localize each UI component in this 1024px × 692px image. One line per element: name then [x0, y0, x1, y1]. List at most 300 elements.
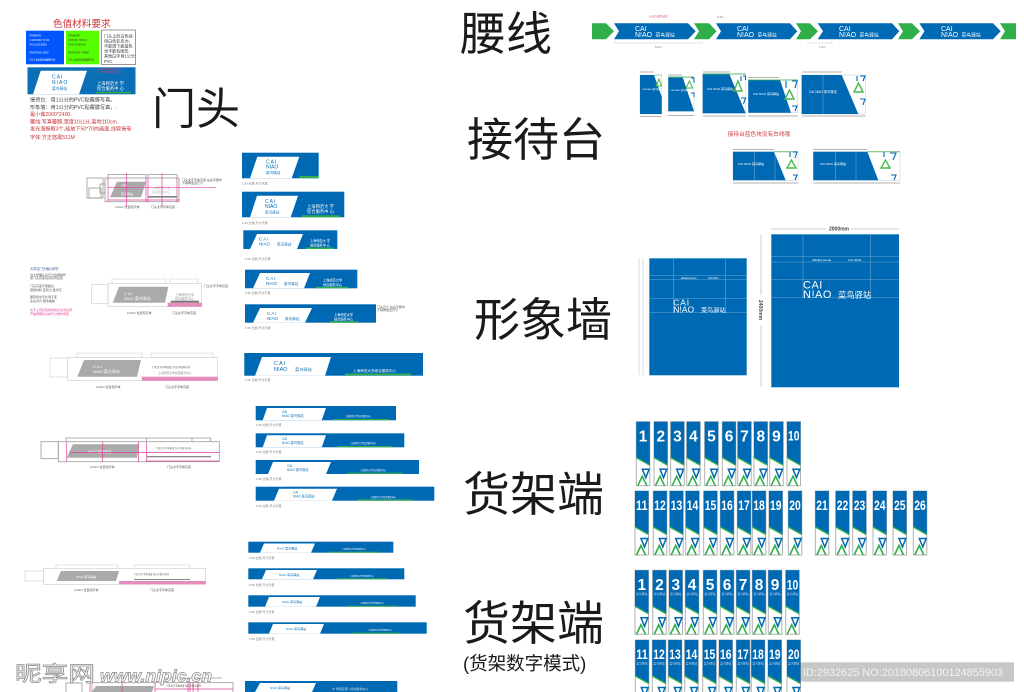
note block: door head confirmation: 招牌材料 亚克力 发光字	[30, 287, 62, 292]
tag 5	[703, 570, 717, 634]
image wall small	[639, 258, 747, 375]
tag 4	[687, 422, 700, 486]
swatch: blue: 门头上蓝色用色值覆膜写真	[29, 58, 56, 62]
tag 1: 1	[637, 577, 646, 594]
tag 2: 2	[655, 577, 664, 594]
tag 7: 菜鸟驿站	[737, 592, 749, 596]
tag 3	[671, 422, 684, 486]
shelf tags row 4 cropped	[635, 640, 800, 692]
tag 13: 菜鸟驿站	[669, 662, 681, 666]
elevation drawing 1: LOGO 位置和字体	[115, 204, 140, 209]
tag 2: 2	[656, 428, 665, 445]
tag 4: 4	[688, 577, 697, 594]
tag 20: 20	[788, 646, 800, 662]
sample door banner: 门头字体要求 亚克力 发光字	[97, 70, 122, 74]
tag 11: 11	[636, 497, 648, 513]
image wall large: CAI	[803, 280, 823, 292]
door sign panel 1: 1:50 比例 尺寸示意	[242, 180, 268, 186]
tag 22: 22	[837, 497, 848, 513]
material notes: 接待台：用1公分的PVC贴覆膜写真。	[30, 96, 115, 104]
image wall small: Alibaba Group	[681, 277, 697, 280]
tag 23	[853, 491, 866, 555]
tag 13	[668, 640, 682, 692]
tag 3: 3	[671, 577, 680, 594]
waistline strip: 菜鸟驿站	[962, 32, 981, 38]
waistline strip: 0.3m	[717, 15, 724, 19]
sign B4: N!AO 菜鸟驿站	[286, 626, 306, 631]
tag 19	[768, 640, 782, 692]
door sign panel 2: 菜鸟驿站	[265, 210, 280, 214]
sign A1: N!AO 菜鸟驿站	[282, 413, 304, 418]
tag 17	[737, 491, 751, 555]
waistline strip: CAI	[737, 26, 749, 33]
tag 12	[652, 640, 666, 692]
door sign panel 4: 菜鸟驿站	[284, 281, 299, 286]
dimension: 2400mm: 2400mm	[757, 300, 763, 321]
sign A4: N!AO 菜鸟驿站	[293, 494, 315, 499]
door sign panel 4: 综合服务中心	[323, 282, 343, 287]
tag 13: 13	[669, 646, 681, 662]
swatch: green: PANTONE 7488C	[68, 50, 89, 54]
tag 5: 菜鸟驿站	[704, 592, 716, 596]
sign B4	[248, 622, 427, 641]
image wall small: CAI NIAO	[708, 277, 719, 280]
note box: door head colours: 门头上的白色块	[104, 32, 133, 38]
elevation drawing 1: 门头文字字体高度 左右字居中	[182, 177, 222, 182]
tag 25: 25	[894, 497, 906, 513]
door sign panel 2: 上海师范大 学	[307, 203, 335, 210]
elevation drawing 1	[87, 173, 222, 209]
note block: door head confirmation: 图形和文字比例不变	[30, 294, 57, 299]
tag 10	[786, 570, 799, 634]
tag 9	[768, 570, 782, 634]
tag 16: 16	[720, 646, 732, 662]
sign B2: 上海师范大学综合服务中心	[350, 574, 374, 578]
door sign panel 3: N!AO	[259, 242, 271, 246]
tag 4: 4	[689, 428, 698, 445]
tag 14	[685, 640, 698, 692]
note box: door head colours: PVC	[104, 59, 112, 64]
sample door banner: NIAO	[52, 80, 68, 86]
door sign panel 3	[243, 230, 337, 261]
tag 24: 24	[874, 497, 886, 513]
door sign panel 1: CAI	[266, 160, 277, 166]
swatch: green: PRIMARY	[68, 34, 81, 38]
image wall small: N!AO	[673, 304, 694, 314]
elevation drawing 4: 门头文字字体高度 左右字居中对齐	[156, 446, 192, 450]
door sign panel 6: N!AO	[274, 367, 288, 373]
tag 2	[654, 422, 668, 486]
note: desk blue block has no white line: 接待台蓝色块没有白线哦	[728, 130, 791, 138]
watermark: ID bar: ID:2932625 NO:20180806100124855903	[803, 667, 1003, 679]
sign A4: 1:50 比例 尺寸示意	[256, 503, 282, 508]
elevation drawing 3: 门头文字字体高度 左右字居中对齐	[152, 365, 191, 369]
tag 8: 菜鸟驿站	[753, 592, 765, 596]
elevation drawing 4	[41, 438, 219, 469]
swatch: green: C65 M0 Y90 K0	[68, 38, 87, 42]
door sign panel 6: 上海师范大学综合服务中心	[353, 368, 397, 373]
tag 14: 菜鸟驿站	[686, 662, 697, 666]
elevation drawing 4: 门头文字字体高度	[167, 464, 191, 469]
tag 4	[685, 570, 699, 634]
tag 3: 菜鸟驿站	[670, 592, 682, 596]
tag 6: 菜鸟驿站	[721, 592, 733, 596]
tag 12: 菜鸟驿站	[653, 662, 665, 666]
desk panel 4	[748, 78, 798, 116]
waistline strip: N!AO	[635, 32, 653, 39]
elevation drawing 6 cropped	[66, 678, 233, 692]
door sign panel 2: 1:50 比例 尺寸示意	[242, 220, 268, 225]
swatch: blue	[26, 31, 64, 64]
door sign bottom cropped: ⊕ 学院名称 | 综合服务中心	[332, 686, 368, 691]
sign A1: 上海师范大学综合服务中心	[345, 414, 372, 418]
tag 16: 16	[721, 497, 733, 513]
elevation drawing 3	[50, 353, 218, 389]
elevation drawing 2: 综合服务中心	[175, 296, 195, 301]
note block: door head confirmation: 左右对齐 居中摆放	[30, 298, 55, 303]
waistline strip: N!AO	[839, 32, 857, 39]
tag 7	[738, 422, 751, 486]
tag 15	[703, 640, 716, 692]
door sign panel 4: 1:50 比例 尺寸示意	[245, 290, 271, 295]
elevation drawing 3: 门头文字字体高度	[165, 384, 189, 389]
tag 6	[722, 422, 736, 486]
tag 26	[913, 491, 927, 555]
tag 17: 菜鸟驿站	[737, 662, 749, 666]
tag 8	[754, 422, 768, 486]
image wall small: 菜鸟驿站	[701, 306, 726, 314]
tag 3	[669, 570, 682, 634]
door sign panel 1: NIAO	[266, 164, 278, 170]
elevation drawing 4: LOGO 位置和字体	[90, 464, 115, 469]
sign B4: 1:50 比例 尺寸示意	[249, 636, 275, 641]
sign B1: N!AO 菜鸟驿站	[277, 546, 297, 550]
tag 11	[635, 491, 648, 555]
watermark: nipic: 昵享网	[15, 663, 95, 686]
tag 18: 18	[753, 497, 765, 513]
sign B3: N!AO 菜鸟驿站	[282, 599, 302, 604]
door sign panel 5	[245, 304, 405, 330]
note block: door head confirmation	[30, 266, 72, 316]
sign A1	[256, 406, 396, 427]
tag 16	[720, 491, 734, 555]
elevation drawing 5: LOGO 位置和字体	[74, 587, 99, 592]
door sign bottom cropped	[245, 681, 397, 692]
elevation drawing 2: N!AO 菜鸟驿站	[124, 295, 151, 301]
material notes: 腰线:写真覆膜,宽度10公分,离地110cm.	[30, 117, 118, 125]
shelf tags row 3 with small caption	[635, 570, 799, 634]
door sign panel 6: 菜鸟驿站	[295, 366, 312, 373]
desk panel 5	[802, 72, 866, 116]
tag 9: 9	[771, 577, 780, 594]
sign B3	[248, 595, 416, 614]
swatch: green	[66, 31, 99, 64]
tag 13	[670, 491, 683, 555]
desk panel 3: CAI NIAO 菜鸟驿站	[707, 86, 733, 91]
door sign panel 5: 不够再加宽尺寸	[377, 307, 398, 312]
sign B2: N!AO 菜鸟驿站	[279, 572, 299, 577]
door sign panel 3: 综合服务中 心	[310, 242, 331, 248]
note block: door head confirmation: 文字上有红色的线和标注请注意	[30, 307, 72, 312]
door sign narrow group A	[256, 406, 434, 508]
note box: door head colours: 也不能有图形.	[104, 48, 130, 54]
desk panel 1	[640, 72, 662, 116]
door sign panel 3: 上海师范大 学	[310, 238, 330, 243]
elevation drawing 1: 门头文字字体高度	[151, 204, 175, 209]
door sign panel 5: 门头尺寸 左右字居中	[377, 304, 405, 309]
tag 18	[751, 640, 765, 692]
tag 19: 19	[769, 646, 781, 662]
tag 24	[873, 491, 886, 555]
tag 5	[705, 422, 718, 486]
watermark: nipic	[15, 663, 212, 686]
door sign panel 5: 综合服务中心	[334, 316, 354, 322]
sign A3: N!AO 菜鸟驿站	[287, 467, 309, 472]
waistline strip: CAI	[839, 26, 851, 33]
door sign panel 5: 上海师范大学	[334, 312, 353, 317]
tag 9	[770, 422, 783, 486]
desk panel 2	[668, 75, 694, 116]
tag 20: 20	[789, 497, 801, 513]
elevation drawing 5: 门头文字字体高度	[150, 587, 174, 592]
tag 6: 6	[723, 577, 732, 594]
elevation drawing 3: 上海师范大学综合服务中心	[158, 371, 192, 375]
waistline strip: N!AO	[737, 32, 755, 39]
heading: 腰线: 腰线	[460, 8, 552, 60]
sign A3: 上海师范大学综合服务中心	[360, 468, 387, 472]
sign B4: 上海师范大学综合服务中心	[368, 628, 392, 632]
tag 7	[736, 570, 750, 634]
tag 15	[704, 491, 717, 555]
desk panel 5: CAI NIAO 菜鸟驿站	[809, 89, 837, 94]
elevation drawing 1: 综合服务中心	[152, 189, 170, 194]
tag 18: 18	[752, 646, 764, 662]
elevation drawing 2	[92, 279, 228, 315]
tag 3: 3	[673, 428, 682, 445]
waistline strip: N!AO	[941, 32, 959, 39]
sign B3: 上海师范大学综合服务中心	[360, 601, 384, 605]
panel: colour and material requirements	[26, 18, 136, 141]
material notes: 字体:方正悠黑511M	[30, 133, 75, 141]
door sign panel 2: NIAO	[265, 204, 277, 210]
desk panel 3	[703, 72, 746, 116]
elevation drawing 3: CAI	[93, 364, 103, 369]
desk panel 7: CAI NIAO 菜鸟驿站	[820, 161, 846, 166]
waistline strip: 菜鸟驿站	[860, 32, 879, 38]
sign A4: CAI	[293, 491, 298, 495]
elevation drawing 1: 上海师范大学	[152, 185, 170, 190]
tag 17: 17	[738, 497, 750, 513]
waistline strip: LOGO 居中对齐	[649, 14, 668, 18]
tag 21	[815, 491, 829, 555]
subheading: 货架数字模式: (货架数字模式)	[463, 653, 586, 674]
tag 1	[636, 422, 650, 486]
tag 13: 13	[671, 497, 682, 513]
heading: 货架端: 货架端	[463, 468, 604, 521]
desk panel 7	[813, 150, 900, 183]
tag 11	[635, 640, 649, 692]
waistline strip: 菜鸟驿站	[758, 32, 777, 38]
sample door banner: 菜鸟驿站	[52, 86, 67, 91]
note box: door head colours: 其他白字用1公分	[104, 52, 135, 58]
tag 1: 1	[639, 428, 648, 445]
image wall large: 菜鸟驿站	[838, 290, 871, 300]
sign B1	[248, 542, 393, 560]
tag 15: 15	[704, 646, 715, 662]
note block: door head confirmation: 门头高度不能超过	[30, 283, 54, 288]
tag 8	[752, 570, 766, 634]
sign B3: 1:50 比例 尺寸示意	[249, 609, 275, 614]
tag 25	[893, 491, 906, 555]
elevation drawing 2: CAI	[124, 291, 134, 296]
note box: door head colours: 不能透下面蓝色	[104, 42, 133, 48]
sign A2: 上海师范大学综合服务中心	[350, 441, 377, 445]
tag 10: 10	[788, 428, 800, 444]
door sign panel 2: 综合服务中 心	[307, 208, 335, 215]
waistline strip: CAI	[941, 26, 953, 33]
elevation drawing 3: N!AO 菜鸟驿站	[93, 368, 120, 374]
elevation drawing 1: 菜鸟驿站	[121, 191, 133, 196]
desk panel 2: CAI NIAO 菜鸟驿站	[670, 88, 690, 92]
sample door banner: 综合服务中 心	[97, 85, 125, 92]
elevation drawing 2: LOGO 位置和字体	[127, 310, 152, 315]
elevation drawing 2: 门头文字字体高度	[172, 310, 196, 315]
elevation drawing 2: 门头文字字体高度	[204, 283, 228, 288]
tag 16	[719, 640, 732, 692]
heading: 货架端 (数字模式): 货架端	[463, 597, 604, 650]
desk panel 6: CAI NIAO 菜鸟驿站	[738, 161, 764, 166]
heading: 门头: 门头	[152, 85, 240, 134]
sign A2: N!AO 菜鸟驿站	[282, 440, 304, 445]
door sign panel 5: 菜鸟驿站	[285, 316, 300, 321]
door sign panel 4	[245, 270, 357, 295]
note box: door head colours: 用白色亚克力，	[104, 38, 133, 44]
tag 7: 7	[740, 428, 749, 445]
tag 20	[787, 640, 800, 692]
door sign panel 3: 菜鸟驿站	[277, 242, 292, 246]
tag 4: 菜鸟驿站	[686, 592, 698, 596]
tag 23: 23	[854, 497, 865, 513]
door sign panel 4: N!AO	[266, 281, 278, 286]
elevation drawing 1: CAI	[121, 184, 127, 188]
sign B1: 上海师范大学综合服务中心	[342, 547, 366, 551]
tag 10	[787, 422, 800, 486]
image wall large: CAI NIAO	[848, 258, 862, 262]
tag 7: 7	[739, 577, 747, 594]
tag 2: 菜鸟驿站	[654, 592, 665, 596]
elevation drawing 4: N!AO 菜鸟驿站	[88, 449, 112, 454]
image wall large: N!AO	[803, 289, 832, 301]
tag 6: 6	[725, 428, 734, 445]
tag 17: 17	[737, 646, 749, 662]
tag 14: 14	[687, 497, 698, 513]
waistline strip: 菜鸟驿站	[656, 32, 675, 38]
tag 19: 19	[770, 497, 782, 513]
material notes: 形象墙：用1公分的PVC贴覆膜写真，.	[30, 103, 117, 111]
waistline strip	[592, 14, 1016, 49]
watermark: ID bar	[801, 662, 1014, 682]
door sign panel 1: 菜鸟驿站	[266, 170, 281, 175]
shelf tags row 1	[636, 422, 800, 486]
tag 8: 8	[755, 577, 764, 594]
image wall large: Alibaba Group	[812, 258, 832, 262]
elevation drawing 5: 门头文字字体高度 左右字居中对齐	[134, 572, 170, 576]
material notes: 发光海报框3个,能放下50*70的画面,线管接电	[30, 125, 131, 133]
tag 12: 12	[654, 497, 666, 513]
elevation drawing 6 cropped: 门头文字字体高度 左右字居中对齐	[166, 684, 202, 688]
tag 15: 15	[705, 497, 716, 513]
tag 17	[736, 640, 750, 692]
note box: door head colours	[102, 30, 136, 64]
door sign bottom cropped: N!AO 菜鸟驿站	[270, 685, 290, 690]
tag 19: 菜鸟驿站	[769, 662, 781, 666]
desk panel 1: CAI NIAO 菜鸟驿站	[642, 87, 662, 91]
door sign panel 6: CAI	[274, 361, 287, 367]
sample door banner: 门头字体要求 亚克力 发光字	[97, 67, 122, 71]
sample door banner	[28, 67, 136, 94]
tag 12	[653, 491, 667, 555]
tag 14	[686, 491, 699, 555]
swatch: green: R100 G255 B0	[68, 42, 86, 46]
tag 5: 5	[706, 577, 715, 594]
shelf tags row 2	[635, 491, 927, 555]
heading: 接待台: 接待台	[467, 114, 605, 166]
tag 11: 11	[636, 646, 648, 662]
door sign panel 3: 1:50 比例 尺寸示意	[245, 256, 271, 261]
door sign panel 6: 1:50 比例 尺寸示意	[245, 377, 271, 382]
door sign panel 1	[242, 153, 319, 186]
swatch: green: 门头上绿色用色值覆膜写真	[68, 58, 95, 62]
swatch: blue: R0 G102 B255	[30, 42, 47, 46]
sign A4: 上海师范大学综合服务中心	[370, 495, 397, 499]
image wall large	[771, 234, 899, 387]
note block: door head confirmation: 请大家确认好尺寸后再制作	[30, 272, 66, 277]
sign B2	[248, 568, 404, 587]
sign A4	[256, 487, 434, 508]
tag 9: 9	[772, 428, 781, 445]
reception desk panels	[640, 72, 900, 183]
dimension: 2000mm	[771, 226, 899, 232]
elevation drawing 5: N!AO 菜鸟驿站	[76, 574, 96, 579]
material notes	[30, 96, 131, 141]
tag 10: 10	[787, 576, 798, 592]
sign A3	[256, 460, 419, 481]
sign A3: 1:50 比例 尺寸示意	[256, 476, 282, 481]
door sign panel 6	[244, 353, 423, 382]
material notes: 最小做2000*2400.	[30, 110, 72, 118]
swatch: blue: C100 M30 Y0 K0	[30, 38, 50, 42]
note block: door head confirmation: 严格按照标注的尺寸制作安装	[30, 311, 69, 316]
tag 22	[836, 491, 849, 555]
tag 15: 菜鸟驿站	[704, 662, 715, 666]
door sign panel 5: 1:50 比例 尺寸示意	[245, 325, 271, 330]
sample door banner: CAI	[52, 74, 63, 80]
tag 1: 菜鸟驿站	[636, 592, 648, 596]
sign A2: 1:50 比例 尺寸示意	[256, 449, 282, 454]
sign A1: 1:50 比例 尺寸示意	[256, 422, 282, 427]
image wall small: CAI	[673, 297, 690, 307]
elevation drawing 1: 不够再加宽尺寸	[182, 180, 203, 185]
door sign narrow group B	[248, 542, 427, 641]
tag 8: 8	[756, 428, 765, 445]
sign B1: 1:50 比例 尺寸示意	[249, 555, 275, 560]
door sign panel 2	[242, 192, 344, 225]
note block: door head confirmation: 如门头有变动请及时反馈	[30, 275, 63, 280]
tag 16: 菜鸟驿站	[720, 662, 732, 666]
door sign panel 4: 上海师范大学	[323, 278, 342, 282]
door sign panel 4: CAI	[266, 276, 277, 281]
door sign panel 2: CAI	[265, 199, 276, 205]
